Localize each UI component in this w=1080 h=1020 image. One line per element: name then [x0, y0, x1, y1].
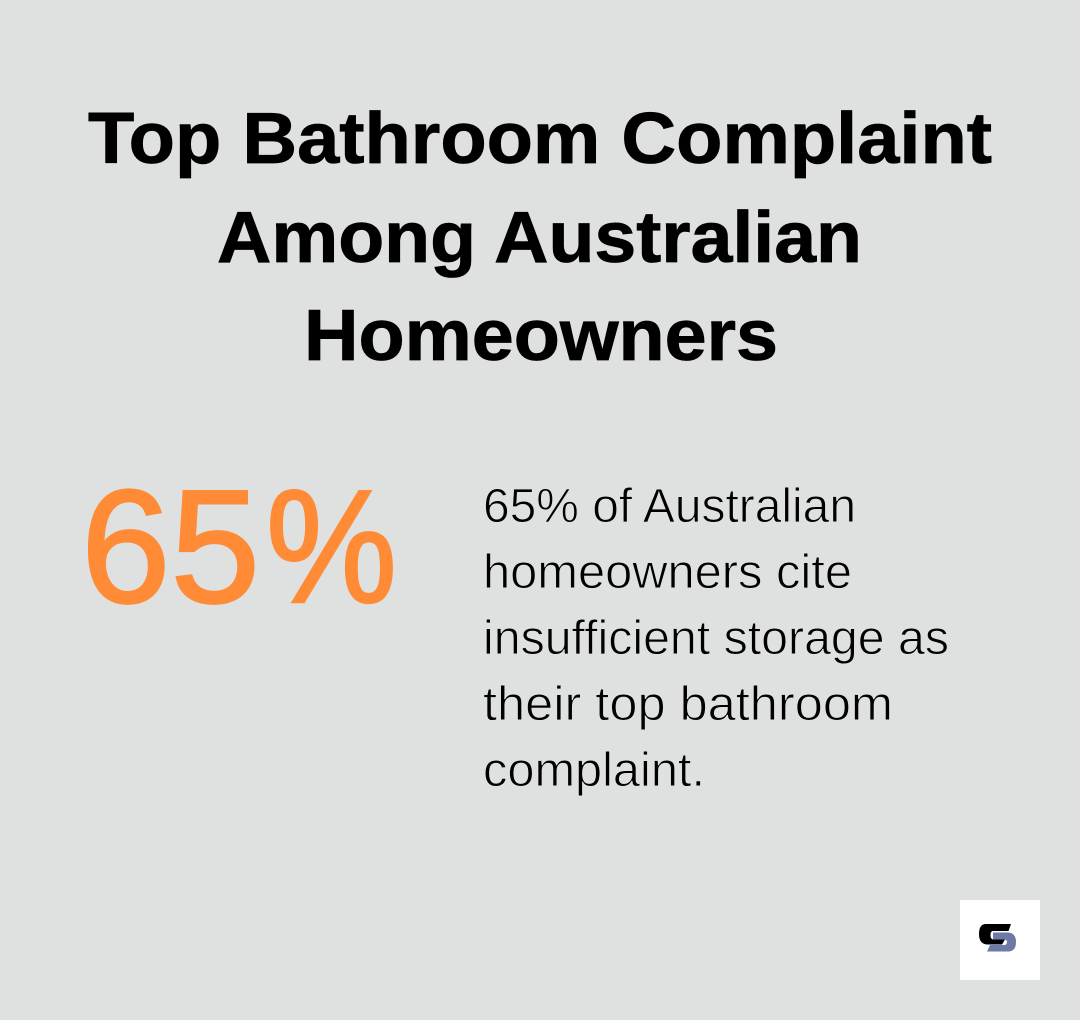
description text: insufficient storage as: [483, 612, 949, 665]
big statistic: 65%: 65: [81, 457, 260, 637]
description text: homeowners cite: [483, 546, 852, 599]
title: Top Bathroom Complaint: [88, 99, 992, 179]
logo badge: [960, 900, 1040, 980]
big statistic: 65%: [81, 457, 397, 637]
title: Homeowners: [304, 296, 778, 376]
title: [88, 99, 992, 376]
description text: complaint.: [483, 744, 705, 797]
title: Among Australian: [217, 198, 862, 278]
big statistic: 65%: %: [266, 457, 397, 637]
description text: their top bathroom: [483, 678, 893, 731]
description text: 65% of Australian: [483, 480, 856, 533]
description text: [483, 480, 949, 797]
